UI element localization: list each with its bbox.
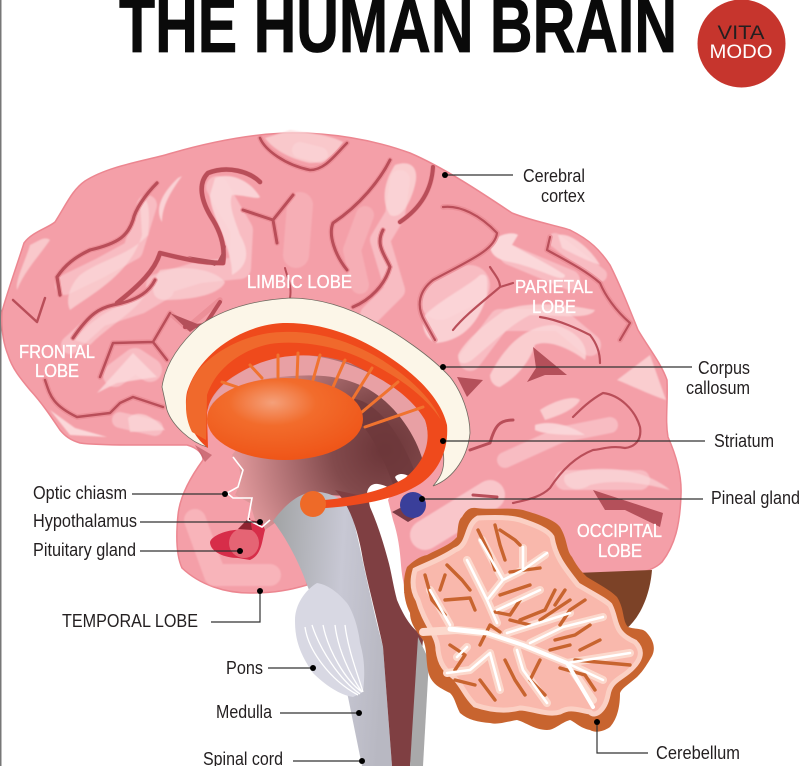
logo badge — [698, 0, 786, 88]
lobe labels: LIMBIC LOBE — [247, 272, 352, 292]
lobe labels: FRONTAL — [19, 342, 95, 362]
ventricle cavity — [207, 352, 429, 530]
highlights on gyri — [17, 130, 670, 490]
callout labels: Hypothalamus — [33, 511, 137, 531]
cerebrum — [2, 133, 681, 625]
lobe labels: LOBE — [598, 541, 642, 561]
brain illustration — [2, 130, 681, 766]
cerebellum white branches — [430, 540, 630, 707]
lobe labels: PARIETAL — [515, 277, 593, 297]
callout labels: Striatum — [714, 431, 774, 451]
callout labels: Medulla — [216, 702, 273, 722]
logo badge: MODO — [710, 42, 772, 63]
cerebellum brown folds — [425, 525, 630, 700]
striatum inner light band — [186, 332, 441, 440]
cerebellum inner lobes — [413, 517, 640, 714]
callout labels: Optic chiasm — [33, 483, 127, 503]
sulci — [13, 138, 640, 503]
callout labels: TEMPORAL LOBE — [62, 611, 198, 631]
cerebellum pale folds — [423, 540, 630, 703]
deep fissure wedges — [170, 245, 663, 527]
callout labels: Pons — [226, 658, 263, 678]
callout labels: Cerebellum — [656, 743, 740, 763]
dark underside behind cerebellum — [575, 570, 652, 632]
lobe labels: LOBE — [35, 361, 79, 381]
callout labels: Cerebral — [523, 166, 585, 186]
lobe labels — [19, 272, 662, 561]
pineal gland — [392, 492, 426, 522]
callout labels: callosum — [686, 378, 750, 398]
callout labels: Pituitary gland — [33, 540, 136, 560]
pons — [295, 583, 364, 697]
corpus callosum — [162, 298, 470, 486]
brainstem — [273, 492, 392, 766]
logo badge: VITA — [718, 23, 765, 44]
fibres — [222, 353, 423, 427]
mid-tone gyri bands — [65, 150, 640, 575]
lobe labels: OCCIPITAL — [577, 521, 662, 541]
optic nerve line — [227, 457, 270, 527]
callout labels — [33, 166, 800, 766]
leader lines and dots — [132, 172, 705, 764]
lobe labels: LOBE — [532, 297, 576, 317]
pituitary gland — [210, 518, 265, 560]
striatum arc — [186, 323, 447, 509]
callout labels: Corpus — [698, 358, 750, 378]
callout labels: cortex — [541, 186, 585, 206]
stalk ball — [300, 491, 326, 517]
thalamus — [207, 378, 363, 460]
white upper blob — [395, 474, 413, 488]
grey strip — [410, 637, 429, 766]
dark strip — [335, 490, 423, 766]
arc interior pink band — [207, 355, 428, 470]
dark shading under fibres — [350, 398, 418, 490]
cerebellum — [404, 508, 654, 732]
white channel — [367, 484, 455, 637]
page border — [0, 0, 2, 766]
